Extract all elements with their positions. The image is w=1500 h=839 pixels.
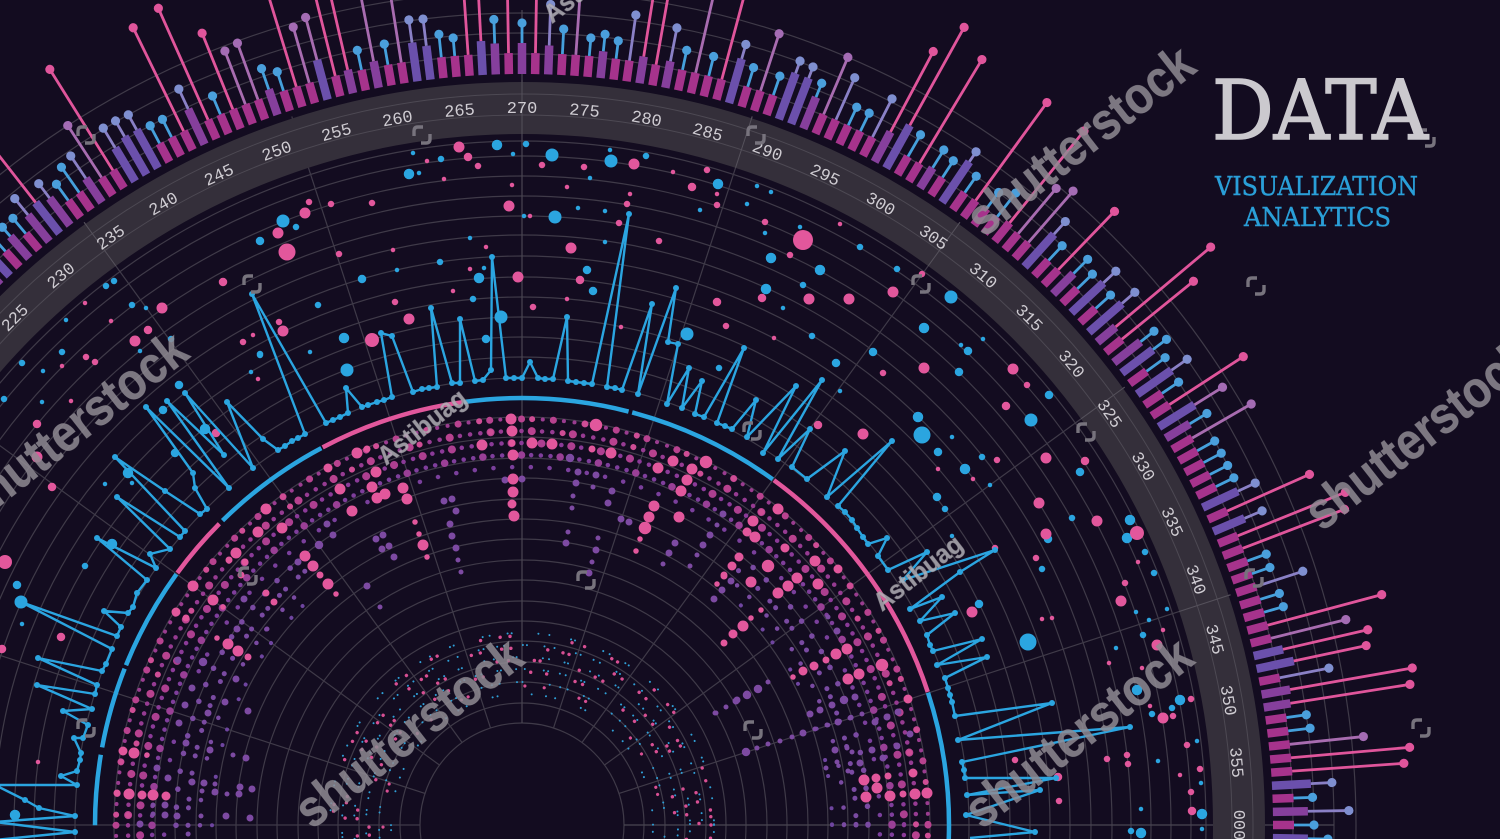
inner tiny dot scatter [330, 633, 714, 839]
subtitle: VISUALIZATION: VISUALIZATION [1214, 172, 1418, 202]
watermark text: Astibuag [867, 528, 968, 617]
degree labels: 260 [381, 108, 414, 132]
degree labels: 250 [260, 138, 295, 167]
watermark text: shutterstock [284, 626, 534, 839]
degree labels: 240 [146, 189, 182, 221]
scatter field: blue dots [4, 144, 1202, 833]
degree labels: 300 [862, 189, 898, 221]
degree labels: 345 [1200, 623, 1226, 657]
dot matrix rings [116, 419, 928, 839]
dot matrix: pink dots [117, 419, 927, 797]
degree labels: 325 [1092, 397, 1125, 433]
degree labels: 310 [964, 260, 1000, 294]
degree labels: 275 [568, 101, 600, 123]
degree labels: 235 [94, 222, 130, 255]
degree labels: 285 [690, 121, 724, 147]
degree labels: 350 [1215, 684, 1239, 717]
degree labels: 270 [507, 100, 537, 119]
blue spike line chart [0, 214, 1130, 839]
watermark text: shutterstock [954, 626, 1204, 839]
subtitle: ANALYTICS: ANALYTICS [1243, 203, 1391, 233]
degree labels: 265 [444, 101, 476, 123]
degree labels: 230 [44, 260, 80, 294]
dot matrix: purple dots [140, 458, 910, 824]
degree labels: 320 [1053, 347, 1087, 383]
degree scale ring [0, 80, 1253, 839]
degree labels: 340 [1180, 563, 1209, 598]
degree labels: 280 [630, 108, 663, 132]
degree labels: 330 [1126, 449, 1158, 485]
degree labels: 290 [749, 138, 784, 167]
watermark text: shutterstock [956, 34, 1206, 247]
title: DATA: DATA [1212, 64, 1430, 159]
degree labels: 355 [1224, 747, 1246, 779]
degree labels: 305 [914, 222, 950, 255]
degree labels [0, 100, 1247, 839]
degree labels: 295 [806, 161, 842, 192]
dot matrix inner rows on the sides [173, 564, 871, 836]
watermark text: Astibuag [371, 382, 472, 471]
degree labels: 315 [1010, 302, 1045, 337]
segmented blue and pink ring [95, 398, 949, 839]
watermark shutter marks [78, 127, 1434, 738]
degree labels: 245 [202, 161, 238, 192]
degree labels: 335 [1155, 505, 1186, 541]
degree labels: 255 [320, 121, 354, 147]
scatter field: pink dots [2, 147, 1200, 811]
